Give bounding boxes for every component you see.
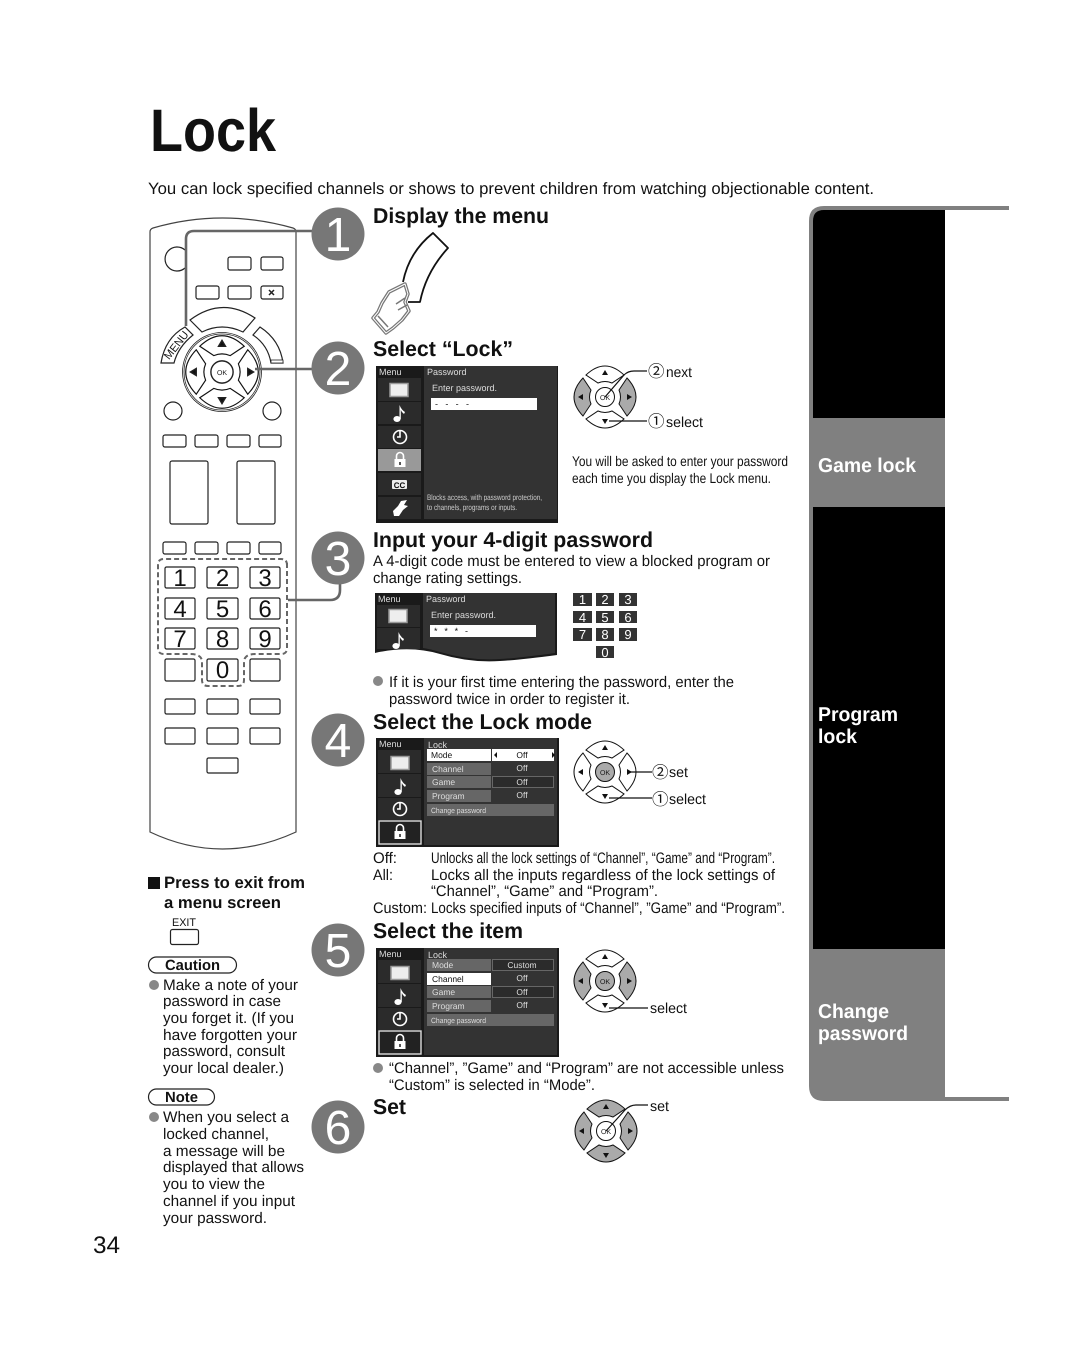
number keys: 0 [216,657,229,684]
number keys: 6 [258,596,272,623]
screen: password entry: Password [426,594,466,604]
step numbers: 6 [325,1102,351,1155]
screen: select item [376,948,559,1057]
number keypad: 6 [624,610,632,625]
screen: lock mode: Change password [431,806,486,815]
d-pad: step 4: set [669,765,688,781]
screen: password menu: Enter password. [432,383,497,393]
heading: display the menu: Display the menu [373,204,549,228]
number keypad: 9 [624,627,632,642]
caution: your local dealer.) [163,1060,284,1077]
panel: sidebar [809,206,1009,1101]
lock mode descriptions: Off: [373,850,397,867]
screen: password menu: Blocks access, with password protection, [427,493,542,502]
caution: password in case [163,993,281,1010]
note: channel if you input [163,1193,296,1210]
text: password explanation: A 4-digit code must be entered to view a blocked program or [373,553,770,570]
d-pad: step 4: select [669,792,706,808]
d-pad on remote [161,307,283,412]
heading: select the item: Select the item [373,919,523,943]
number keys [165,565,280,684]
d-pad: step 2 [574,363,703,431]
screen: select item: Program [432,1001,465,1011]
d-pad on remote: OK [217,370,227,377]
screen: lock mode: Off [516,763,528,773]
screen: lock mode: Lock [428,740,448,750]
d-pad: step 2: select [666,415,703,431]
screen: password menu: CC [394,481,405,490]
sidebar label: change password: Change [818,1001,889,1023]
lower buttons [165,699,280,773]
screen: password menu: Menu [379,367,402,377]
note: locked channel, [163,1126,269,1143]
step numbers [312,208,364,1155]
exit instruction: Press to exit from [164,874,305,892]
number keypad: 8 [601,627,609,642]
remote upper buttons [165,247,283,299]
note [148,1089,304,1227]
number keys: 9 [258,626,272,653]
lock mode descriptions: Locks specified inputs of “Channel”, ”Game” and “Program”. [431,900,785,917]
note: a message will be [163,1143,285,1160]
small button row [163,542,281,554]
d-pad: step 5: OK [600,979,610,986]
d-pad: step 2: ① [648,413,664,431]
bullet: custom note: “Channel”, ”Game” and “Program” are not accessible unless [389,1060,784,1077]
heading: set: Set [373,1095,406,1119]
caution [148,957,298,1077]
screen: password entry: Menu [378,594,401,604]
heading: input password: Input your 4-digit password [373,528,653,552]
note: When you select a [163,1109,289,1126]
d-pad: step 4: ① [652,791,668,809]
lock mode descriptions: All: [373,867,393,884]
number keys: 5 [216,596,229,623]
caution: Make a note of your [163,977,298,994]
screen: lock mode: Off [516,750,528,760]
text: password explanation [373,553,770,587]
caution: you forget it. (If you [163,1010,294,1027]
d-pad: step 5: select [650,1001,687,1017]
number keys: 1 [173,565,187,592]
screen: password entry [375,593,557,661]
panel: remote control [150,218,296,849]
sidebar label: change password [818,1001,908,1045]
round buttons [164,402,281,420]
screen: select item: Menu [379,949,402,959]
screen: select item: Mode [432,960,454,970]
number keys: 3 [258,565,272,592]
d-pad: step 4 [574,741,706,809]
sidebar label: game lock: Game lock [818,455,917,477]
note: your password. [163,1210,267,1227]
bullet: first time password: password twice in order to register it. [389,691,630,708]
number keypad: 7 [579,627,586,642]
connector lines [186,231,340,600]
number keypad: 0 [601,645,609,660]
title: Lock [150,97,277,164]
d-pad: step 6 [575,1099,669,1162]
screen: lock mode: Program [432,791,465,801]
lock mode descriptions: Unlocks all the lock settings of “Channel”, “Game” and “Program”. [431,850,775,867]
password note: You will be asked to enter your password [572,453,788,469]
number keypad: 5 [601,610,609,625]
screen: password entry: Enter password. [431,610,496,620]
lock mode descriptions: Custom: [373,900,427,917]
lock mode descriptions [373,850,785,917]
screen: lock mode: Menu [379,739,402,749]
note: Note [165,1090,198,1106]
bullet: custom note: “Custom” is selected in “Mode”. [389,1077,595,1094]
screen: select item: Off [516,973,528,983]
sidebar label: program lock: lock [818,726,858,748]
colour button row [163,435,281,447]
heading: select lock: Select “Lock” [373,337,513,361]
d-pad: step 4: ② [652,764,668,782]
number keypad: 2 [601,592,609,607]
d-pad: step 2: next [666,365,692,381]
number keys: 7 [173,626,187,653]
exit instruction: EXIT [172,917,196,929]
screen: lock mode: Off [516,777,528,787]
number keys: 8 [216,626,229,653]
screen: select item: Change password [431,1016,486,1025]
screen: lock mode: Game [432,777,455,787]
number keypad: 3 [624,592,632,607]
number keys: 4 [173,596,187,623]
note: displayed that allows [163,1159,304,1176]
screen: select item: Channel [432,974,464,984]
tall buttons [170,461,275,524]
exit instruction: a menu screen [164,894,281,912]
sidebar label: change password: password [818,1023,908,1045]
screen: password menu: to channels, programs or inputs. [427,503,517,512]
page number: 34 [93,1232,120,1259]
remote body [150,218,296,849]
d-pad: step 6: set [650,1099,669,1115]
bullet: custom note [373,1060,784,1094]
number keypad: 4 [579,610,586,625]
screen: lock mode: Off [516,790,528,800]
password note: each time you display the Lock menu. [572,470,771,486]
note: you to view the [163,1176,265,1193]
step numbers: 2 [325,343,351,396]
intro text: You can lock specified channels or shows to prevent children from watching objectionable content. [148,180,874,198]
screen: select item: Game [432,987,455,997]
lock mode descriptions: Locks all the inputs regardless of the lock settings of [431,867,776,884]
screen: password menu: - - - - [435,399,469,409]
d-pad: step 2: OK [600,395,610,402]
MENU label: MENU [162,329,192,362]
screen: lock mode [376,738,559,847]
screen: password entry: * * * - [434,626,468,636]
screen: lock mode: Mode [431,750,453,760]
icon: hand pressing menu button [373,233,448,333]
screen: select item: Lock [428,950,448,960]
step numbers: 3 [325,533,351,586]
sidebar label: program lock: Program [818,704,898,726]
lock mode descriptions: “Channel”, “Game” and “Program”. [431,883,658,900]
screen: lock mode: Channel [432,764,464,774]
caution: Caution [165,958,220,974]
caution: have forgotten your [163,1027,297,1044]
d-pad: step 5 [574,950,687,1017]
number keypad: 1 [579,592,586,607]
sidebar label: program lock [818,704,898,748]
bullet: first time password [373,674,734,708]
number keypad [573,592,637,660]
screen: password menu [376,366,558,523]
number keys: 2 [216,565,229,592]
text: password explanation: change rating settings. [373,570,522,587]
bullet: first time password: If it is your first time entering the password, enter the [389,674,734,691]
password note [572,453,788,486]
screen: select item: Off [516,987,528,997]
exit instruction [148,874,305,944]
step numbers: 4 [325,715,351,768]
d-pad: step 6: OK [601,1129,611,1136]
caution: password, consult [163,1043,286,1060]
screen: select item: Off [516,1000,528,1010]
screen: password menu: Password [427,367,467,377]
step numbers: 5 [325,925,351,978]
d-pad: step 4: OK [600,770,610,777]
step numbers: 1 [325,209,351,262]
screen: select item: Custom [507,960,537,970]
d-pad: step 2: ② [648,363,664,381]
heading: select lock mode: Select the Lock mode [373,710,592,734]
